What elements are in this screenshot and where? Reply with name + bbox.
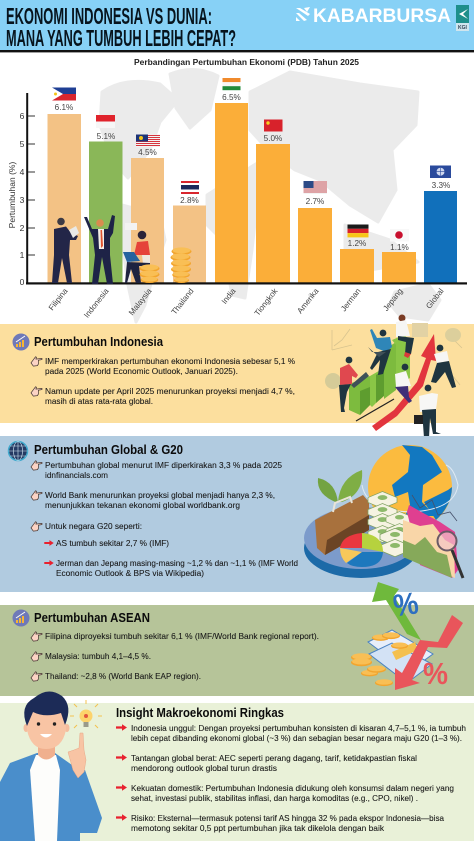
category labels: Indonesia <box>82 286 111 320</box>
flag: Filipina <box>52 88 76 100</box>
eyes and smile <box>37 722 40 726</box>
bullet: World Bank: menunjukkan tekanan ekonomi global worldbank.org <box>45 500 240 510</box>
panel: Insight Makroekonomi Ringkas <box>0 691 474 841</box>
cash pile <box>368 630 433 672</box>
person: pushing arrow <box>437 345 443 351</box>
value labels: 6.5% <box>222 93 241 102</box>
green bars <box>349 335 410 421</box>
title: MANA YANG TUMBUH LEBIH CEPAT? <box>6 25 236 51</box>
category labels: Thailand <box>170 287 196 316</box>
panel: Pertumbuhan Indonesia <box>0 324 474 423</box>
category labels: Filipina <box>47 286 70 312</box>
bullet: update April: masih di atas rata-rata global. <box>45 396 153 406</box>
value labels: 1.2% <box>348 239 366 248</box>
bullet: Kekuatan domestik: Kekuatan domestik: Pertumbuhan Indonesia didukung oleh konsumsi dalam negeri yang <box>131 783 454 793</box>
bullet: Thailand: Thailand: ~2,8 % (World Bank EAP region). <box>45 671 201 681</box>
people <box>339 314 456 438</box>
globe <box>368 445 452 529</box>
y axis: 1 <box>20 250 25 260</box>
flag: Global <box>430 166 451 178</box>
category labels: India <box>220 286 238 306</box>
bullet: update April <box>31 386 295 406</box>
world map background <box>100 69 440 322</box>
green arrow <box>372 582 421 640</box>
bullet: Indonesia unggul <box>116 723 466 743</box>
illustration: growth team <box>325 314 462 438</box>
icon: chart badge <box>12 334 30 350</box>
chart title: Perbandingan Pertumbuhan Ekonomi (PDB) Tahun 2025 <box>134 57 359 67</box>
bullet: Risiko: memotong sekitar 0,5 ppt pertumbuhan jika tak dikelola dengan baik <box>131 823 385 833</box>
flag: Jerman <box>348 224 368 237</box>
faint background charts <box>332 329 462 385</box>
flag: Malaysia <box>136 134 160 147</box>
leaves <box>318 478 338 503</box>
person: white shirt crouching <box>402 364 408 370</box>
network lines <box>412 495 457 521</box>
ears <box>24 724 28 732</box>
flag: Amerika <box>304 181 327 194</box>
face <box>27 712 66 749</box>
value labels: 3.3% <box>432 181 450 190</box>
figure: man with document <box>52 218 79 283</box>
bullet: Kekuatan domestik: sehat, investasi publik, stabilitas inflasi, dan harga komoditas (e.g., CPO, nikel) . <box>131 793 418 803</box>
value labels: 2.8% <box>180 196 199 205</box>
hand <box>68 733 86 778</box>
heading: Pertumbuhan Indonesia <box>34 334 164 349</box>
bullet: Indonesia unggul: lebih cepat dibanding ekonomi global (~3 %) dan sebagian besar negara maju G20 (1–3 %). <box>131 733 462 743</box>
people and coins on bars <box>52 215 192 284</box>
panel: Pertumbuhan Global & G20 <box>0 436 474 592</box>
person: red shirt <box>346 357 352 363</box>
icon: globe <box>8 442 28 460</box>
panel: Pertumbuhan ASEAN <box>0 582 474 696</box>
logo: KGI <box>456 5 469 31</box>
person: with briefcase <box>425 385 431 391</box>
sub-bullet: Jerman dan Jepang <box>44 558 298 578</box>
bullet: IMF global: idnfinancials.com <box>45 470 108 480</box>
value labels <box>55 93 450 252</box>
title <box>6 3 236 51</box>
flag: Thailand <box>181 181 199 194</box>
illustration: money and arrows <box>351 582 463 691</box>
bullet: Risiko <box>116 813 444 833</box>
value labels: 5.0% <box>264 134 282 143</box>
y axis: 3 <box>20 195 25 205</box>
briefcase <box>315 495 369 555</box>
bars <box>48 103 457 283</box>
category labels: Malaysia <box>127 286 154 317</box>
jacket <box>0 753 102 841</box>
shirt <box>30 755 60 841</box>
y axis: 4 <box>20 167 25 177</box>
coin stacks <box>140 247 192 283</box>
y axis <box>7 93 35 287</box>
icon: light bulb <box>70 700 102 728</box>
value labels: 5.1% <box>97 132 115 141</box>
figure: man cheering <box>84 215 115 284</box>
value labels: 2.7% <box>306 197 324 206</box>
cash stacks <box>368 492 413 557</box>
bullet: World Bank <box>31 490 275 510</box>
person: top <box>398 314 406 322</box>
header band <box>0 0 474 52</box>
magnifier <box>438 532 463 578</box>
bullet: IMF <box>31 356 295 376</box>
value labels: 1.1% <box>390 243 409 252</box>
bullet: IMF global: Pertumbuhan global menurut IMF diperkirakan 3,3 % pada 2025 <box>45 460 282 470</box>
coins <box>372 634 389 641</box>
bullet: Malaysia: Malaysia: tumbuh 4,1–4,5 %. <box>45 651 151 661</box>
category labels: Tiongkok <box>253 286 280 318</box>
person: blue shirt <box>380 330 386 336</box>
bullet: IMF: IMF memperkirakan pertumbuhan ekonomi Indonesia sebesar 5,1 % <box>45 356 295 366</box>
bullet: Risiko: Risiko: Eksternal—termasuk potensi tarif AS hingga 32 % pada ekspor Indonesia—bisa <box>131 813 444 823</box>
flag: India <box>222 78 240 90</box>
area chart <box>403 505 458 578</box>
x axis <box>26 282 467 284</box>
bullet: Tantangan global: Tantangan global berat: AEC seperti perang dagang, tarif, ketidakpastian fiskal <box>131 753 417 763</box>
icon: chart badge <box>12 610 30 626</box>
flag: Indonesia <box>96 115 115 128</box>
y axis: 6 <box>20 111 25 121</box>
red arrow <box>395 615 463 690</box>
heading: Pertumbuhan Global & G20 <box>34 442 183 457</box>
logo: KGI: KGI <box>458 25 468 31</box>
value labels: 4.5% <box>138 148 157 157</box>
sub-bullet: Jerman dan Jepang: Jerman dan Jepang masing-masing ~1,2 % dan ~1,1 % (IMF World <box>56 558 298 568</box>
category labels: Jerman <box>339 287 363 313</box>
pie <box>340 533 383 567</box>
bullet: Filipina: Filipina diproyeksi tumbuh sekitar 6,1 % (IMF/World Bank regional report). <box>45 631 319 641</box>
flag: Jepang <box>390 229 409 242</box>
category labels: Jepang <box>381 287 405 313</box>
figure: woman with laptop <box>123 223 150 283</box>
red percent: % <box>423 656 448 691</box>
illustration: man pointing up <box>0 691 102 841</box>
red arrow <box>372 334 436 431</box>
logo: Kabarbursa: KABARBURSA <box>313 5 451 27</box>
bullet: IMF global <box>31 460 282 480</box>
platform <box>304 518 418 578</box>
neck <box>38 742 55 760</box>
blue percent: % <box>391 585 421 623</box>
y axis: 2 <box>20 223 25 233</box>
title: EKONOMI INDONESIA VS DUNIA: <box>6 3 212 29</box>
illustration: globe and finance <box>304 445 463 578</box>
bullet: Indonesia unggul: Indonesia unggul: Dengan proyeksi pertumbuhan konsisten di kisaran 4,7–5,1 %, ia tumbuh <box>131 723 466 733</box>
bullet: Tantangan global: mendorong outlook global turun drastis <box>131 763 277 773</box>
category labels: Amerika <box>295 286 321 315</box>
bullet: Kekuatan domestik <box>116 783 454 803</box>
bar chart <box>7 93 467 320</box>
bullet: update April: Namun update per April 2025 menurunkan proyeksi menjadi 4,7 %, <box>45 386 295 396</box>
value labels: 6.1% <box>55 103 73 112</box>
hair <box>24 691 68 726</box>
y axis: 5 <box>20 139 25 149</box>
heading: Pertumbuhan ASEAN <box>34 610 150 625</box>
heading: Insight Makroekonomi Ringkas <box>116 705 284 720</box>
sub-bullet: Jerman dan Jepang: Economic Outlook & BPS via Wikipedia) <box>56 568 204 578</box>
bullet: IMF: pada 2025 (World Economic Outlook, Januari 2025). <box>45 366 238 376</box>
y axis: Pertumbuhan (%) <box>7 162 17 228</box>
category labels <box>47 286 446 320</box>
category labels: Global <box>424 287 446 310</box>
flag: Tiongkok <box>264 120 282 132</box>
y axis: 0 <box>20 277 25 287</box>
bullet: World Bank: World Bank menurunkan proyeksi global menjadi hanya 2,3 %, <box>45 490 275 500</box>
sub-bullet: AS: AS tumbuh sekitar 2,7 % (IMF) <box>56 538 169 548</box>
bullet: Tantangan global <box>116 753 417 773</box>
bullet: G20: Untuk negara G20 seperti: <box>45 521 142 531</box>
